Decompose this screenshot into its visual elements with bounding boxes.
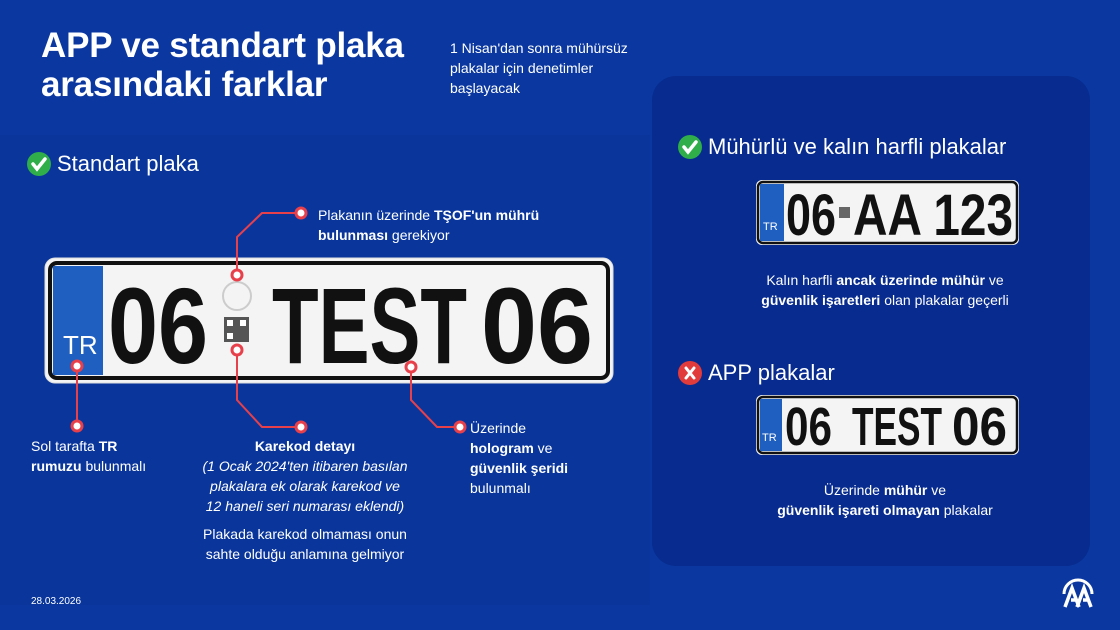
- callout: seal: Plakanın üzerinde TŞOF'un mührü: [318, 207, 539, 223]
- text: APP açıklama: [777, 482, 993, 518]
- callout: hologram: bulunmalı: [470, 480, 531, 496]
- plate: 06 AA 123: TR: [763, 221, 778, 233]
- callout: karekod: 12 haneli seri numarası eklendi): [206, 498, 404, 514]
- main plate: TEST: [272, 265, 467, 384]
- text: APP açıklama: güvenlik işareti olmayan plakalar: [777, 502, 993, 518]
- callout: TR: rumuzu bulunmalı: [31, 458, 146, 474]
- heading: standart plaka: Standart plaka: [57, 151, 199, 176]
- callout: seal: [318, 207, 539, 243]
- plate: APP: TR: [762, 432, 777, 444]
- callout: karekod: sahte olduğu anlamına gelmiyor: [206, 546, 404, 562]
- main plate: 06: [481, 265, 593, 384]
- date: 28.03.2026: [31, 596, 81, 607]
- subtitle: 1 Nisan'dan sonra mühürsüz: [450, 40, 628, 56]
- callout: karekod: [202, 438, 408, 562]
- left panel background: [0, 135, 650, 605]
- logo: AA: [1062, 578, 1094, 608]
- callout: karekod: plakalara ek olarak karekod ve: [210, 478, 400, 494]
- main plate: TR: [63, 330, 98, 360]
- right panel: [652, 76, 1090, 566]
- callout: hologram: güvenlik şeridi: [470, 460, 568, 476]
- plate: 06 AA 123: [756, 180, 1019, 246]
- plate: APP: TEST: [852, 397, 942, 456]
- plate: APP: 06: [952, 397, 1007, 456]
- heading: mühürlü: Mühürlü ve kalın harfli plakalar: [708, 134, 1006, 159]
- plate: APP: 06: [785, 397, 832, 456]
- text: mühürlü açıklama: Kalın harfli ancak üzerinde mühür ve: [766, 272, 1004, 288]
- callout: TR: [31, 438, 146, 474]
- subtitle: [450, 40, 628, 96]
- callout: karekod: Plakada karekod olmaması onun: [203, 526, 407, 542]
- callout: karekod: Karekod detayı: [255, 438, 355, 454]
- subtitle: başlayacak: [450, 80, 520, 96]
- subtitle: plakalar için denetimler: [450, 60, 593, 76]
- callout: hologram: hologram ve: [470, 440, 552, 456]
- callout: karekod: (1 Ocak 2024'ten itibaren basılan: [202, 458, 408, 474]
- text: mühürlü açıklama: [761, 272, 1009, 308]
- title: APP ve standart plaka: [41, 26, 404, 65]
- title: arasındaki farklar: [41, 65, 327, 104]
- callout: hologram: Üzerinde: [470, 420, 526, 436]
- text: mühürlü açıklama: güvenlik işaretleri olan plakalar geçerli: [761, 292, 1009, 308]
- heading: APP plakalar: APP plakalar: [708, 360, 835, 385]
- callout: TR: Sol tarafta TR: [31, 438, 117, 454]
- text: APP açıklama: Üzerinde mühür ve: [824, 482, 946, 498]
- callout: hologram: [470, 420, 568, 496]
- plate: APP: [756, 395, 1019, 456]
- main plate: [44, 258, 614, 384]
- main plate: 06: [108, 265, 208, 384]
- callout: seal: bulunması gerekiyor: [318, 227, 449, 243]
- connectors: [70, 206, 466, 434]
- title: [41, 26, 404, 104]
